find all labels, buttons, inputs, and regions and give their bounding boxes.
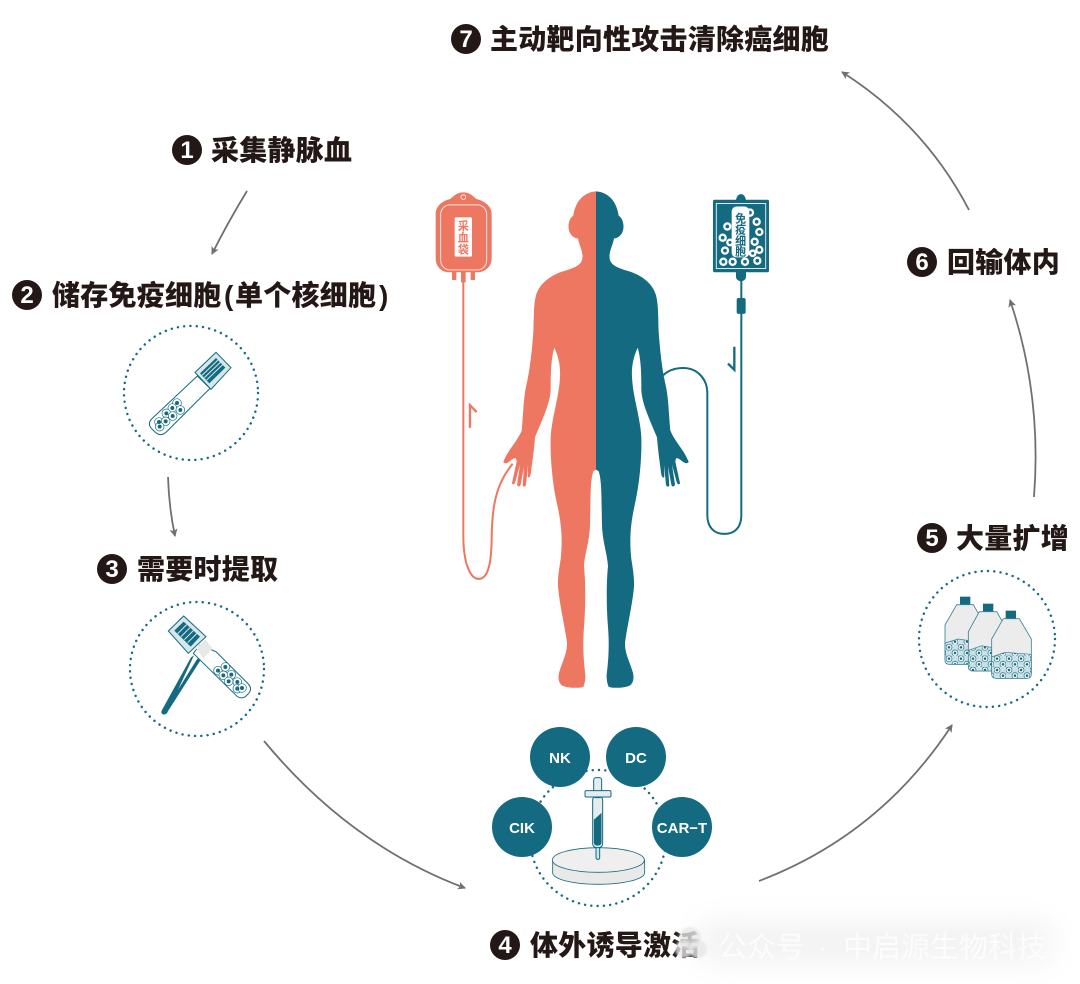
dotted circle <box>130 602 264 736</box>
immune cell bag with tube <box>663 194 769 534</box>
bag tube <box>463 280 513 579</box>
dotted circle <box>919 571 1055 707</box>
step 5 heading: 5 <box>925 525 939 552</box>
watermark text: 中启源生物科技 <box>843 931 1046 964</box>
watermark text: 公众号 <box>718 932 805 964</box>
dotted circle <box>124 326 258 460</box>
step 2 heading <box>12 279 389 311</box>
flask 1 <box>945 597 985 664</box>
step 2 heading: 单个核细胞 <box>235 279 376 311</box>
flask 2 <box>968 604 1008 671</box>
bag ports <box>452 270 475 282</box>
step 3 heading: 3 <box>105 556 119 583</box>
watermark text: · <box>818 932 828 964</box>
bag label: 免 <box>735 211 746 225</box>
inner outline <box>716 204 766 269</box>
arrow: step 4 to 5 <box>759 725 952 881</box>
cell: CAR-T <box>652 797 712 857</box>
human body, half salmon half teal <box>503 191 689 688</box>
arrow: step 2 to 3 <box>168 477 175 536</box>
step 5 heading: 大量扩增 <box>956 523 1069 554</box>
cell: CAR-T: CAR−T <box>657 820 707 837</box>
cell: NK <box>530 727 590 787</box>
infusion tube <box>663 278 741 534</box>
arrow: step 3 to 4 <box>264 741 465 888</box>
bag label: 疫 <box>735 223 746 237</box>
step 3 heading: 需要时提取 <box>137 554 278 585</box>
dotted circle <box>530 770 666 906</box>
watermark haze <box>700 925 1050 959</box>
hanging hole <box>461 195 466 199</box>
step 2 heading: 2 <box>20 282 34 309</box>
arrow: step 6 to 7 <box>842 72 969 210</box>
bag label: 胞 <box>735 245 746 259</box>
flask 3 <box>992 611 1031 678</box>
step 2 heading: ( <box>224 280 234 311</box>
flasks <box>945 597 1031 678</box>
cell: CIK <box>492 797 552 857</box>
step 7 heading: 7 <box>459 26 473 53</box>
step 4 heading: 体外诱导激活 <box>530 930 700 961</box>
cryotube <box>149 352 231 435</box>
step 2 heading: 储存免疫细胞 <box>52 280 222 311</box>
bag label <box>732 207 749 259</box>
body right half <box>596 191 689 688</box>
immune cells in bag <box>720 210 762 265</box>
bag label: 采 <box>458 219 469 233</box>
body left half <box>503 191 596 688</box>
cell: DC: DC <box>625 750 647 767</box>
bag label: 血 <box>458 231 469 245</box>
step 3 icon: tweezers and tube in dotted circle <box>130 602 264 736</box>
cell: CIK: CIK <box>509 820 535 837</box>
flow arrow mark <box>728 347 734 370</box>
blood collection bag with tube <box>436 192 513 579</box>
step 2 icon: test tube in dotted circle <box>124 326 258 460</box>
bag body <box>436 192 492 272</box>
bag label: 细 <box>735 234 746 248</box>
arrow: step 5 to 6 <box>1010 300 1036 497</box>
bag inner outline <box>441 205 487 270</box>
arrow: step 1 to 2 <box>212 191 247 254</box>
cell: DC <box>606 727 666 787</box>
tube and tweezers <box>161 616 251 715</box>
step 6 heading: 6 <box>915 249 929 276</box>
bag body <box>713 200 769 272</box>
dropper <box>585 778 611 859</box>
step 1 heading: 1 <box>180 137 194 164</box>
step 6 heading: 回输体内 <box>947 246 1060 278</box>
step 4 heading: 4 <box>498 932 512 959</box>
flow arrow mark <box>470 405 477 428</box>
step 5 icon: culture flasks in dotted circle <box>919 571 1055 707</box>
step 2 heading: ) <box>379 280 389 311</box>
petri dish <box>552 848 645 884</box>
step 4 icon: culture dish, dropper and cell types <box>492 727 712 906</box>
bag label <box>455 217 472 257</box>
step 7 heading: 主动靶向性攻击清除癌细胞 <box>490 23 829 55</box>
cloud logo <box>675 927 707 958</box>
watermark <box>675 925 1050 964</box>
top tab and bottom connector <box>736 194 746 281</box>
drip chamber <box>737 298 746 314</box>
step 1 heading: 采集静脉血 <box>211 135 352 166</box>
cell: NK: NK <box>549 750 571 767</box>
bag label: 袋 <box>458 242 469 256</box>
